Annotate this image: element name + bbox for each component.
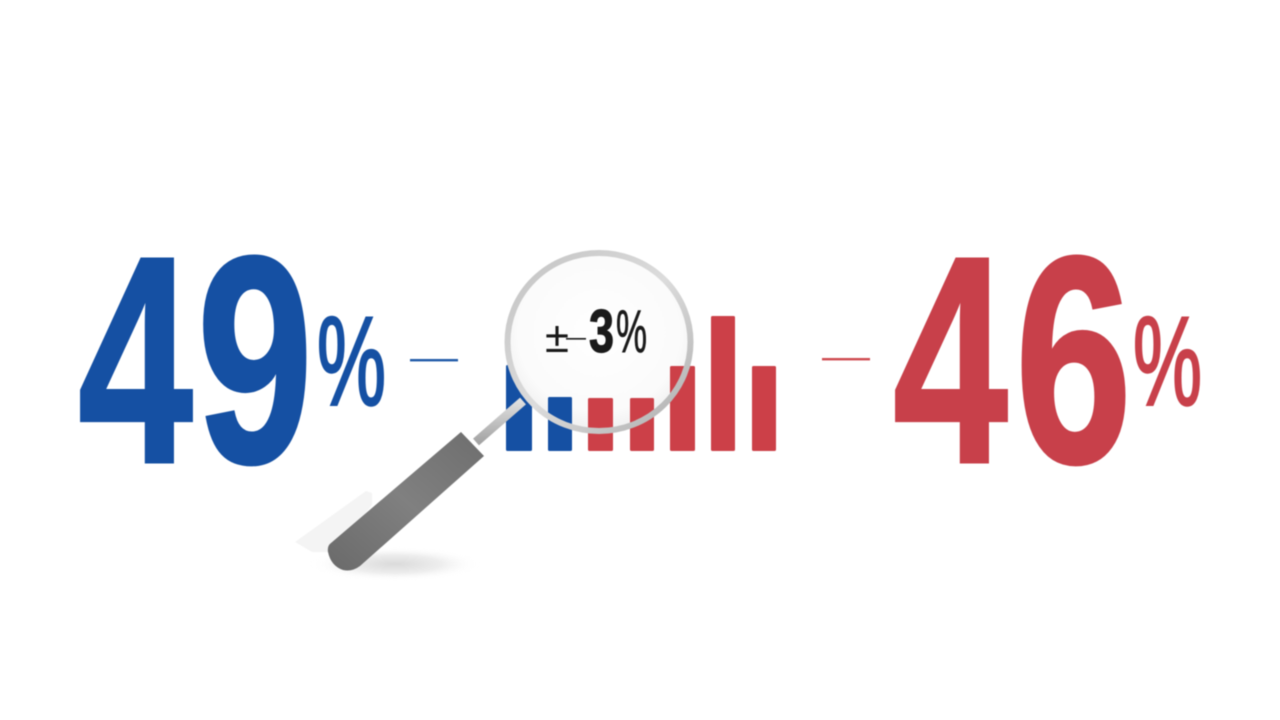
blue bar behind lens bbox=[506, 365, 532, 451]
margin of error label: ±3%: % bbox=[616, 298, 647, 365]
blue percentage: 49% bbox=[78, 195, 386, 525]
red percentage: 46%: % bbox=[1133, 291, 1202, 432]
grey handle bbox=[328, 432, 484, 570]
blue connector line bbox=[410, 359, 458, 361]
bar chart: bars in front of lens bbox=[548, 316, 776, 451]
lens ring bbox=[508, 253, 690, 431]
metal rod bbox=[476, 401, 523, 442]
red connector line bbox=[822, 358, 870, 360]
margin of error label: ±3%: ± bbox=[545, 313, 569, 362]
magnifying glass bbox=[328, 253, 690, 570]
red percentage: 46% bbox=[893, 195, 1202, 525]
blue percentage: 49%: 4 bbox=[78, 195, 194, 525]
magnifying glass shadow bbox=[310, 547, 480, 581]
margin of error label: ±3% bbox=[545, 298, 647, 365]
blue percentage: 49%: 9 bbox=[197, 195, 313, 525]
handle reflection bbox=[295, 491, 372, 552]
red percentage: 46%: 4 bbox=[893, 195, 1009, 525]
margin of error label: ±3%: 3 bbox=[589, 298, 614, 365]
red percentage: 46%: 6 bbox=[1015, 195, 1132, 525]
blue percentage: 49%: % bbox=[317, 291, 386, 432]
lens glass bbox=[507, 253, 691, 431]
